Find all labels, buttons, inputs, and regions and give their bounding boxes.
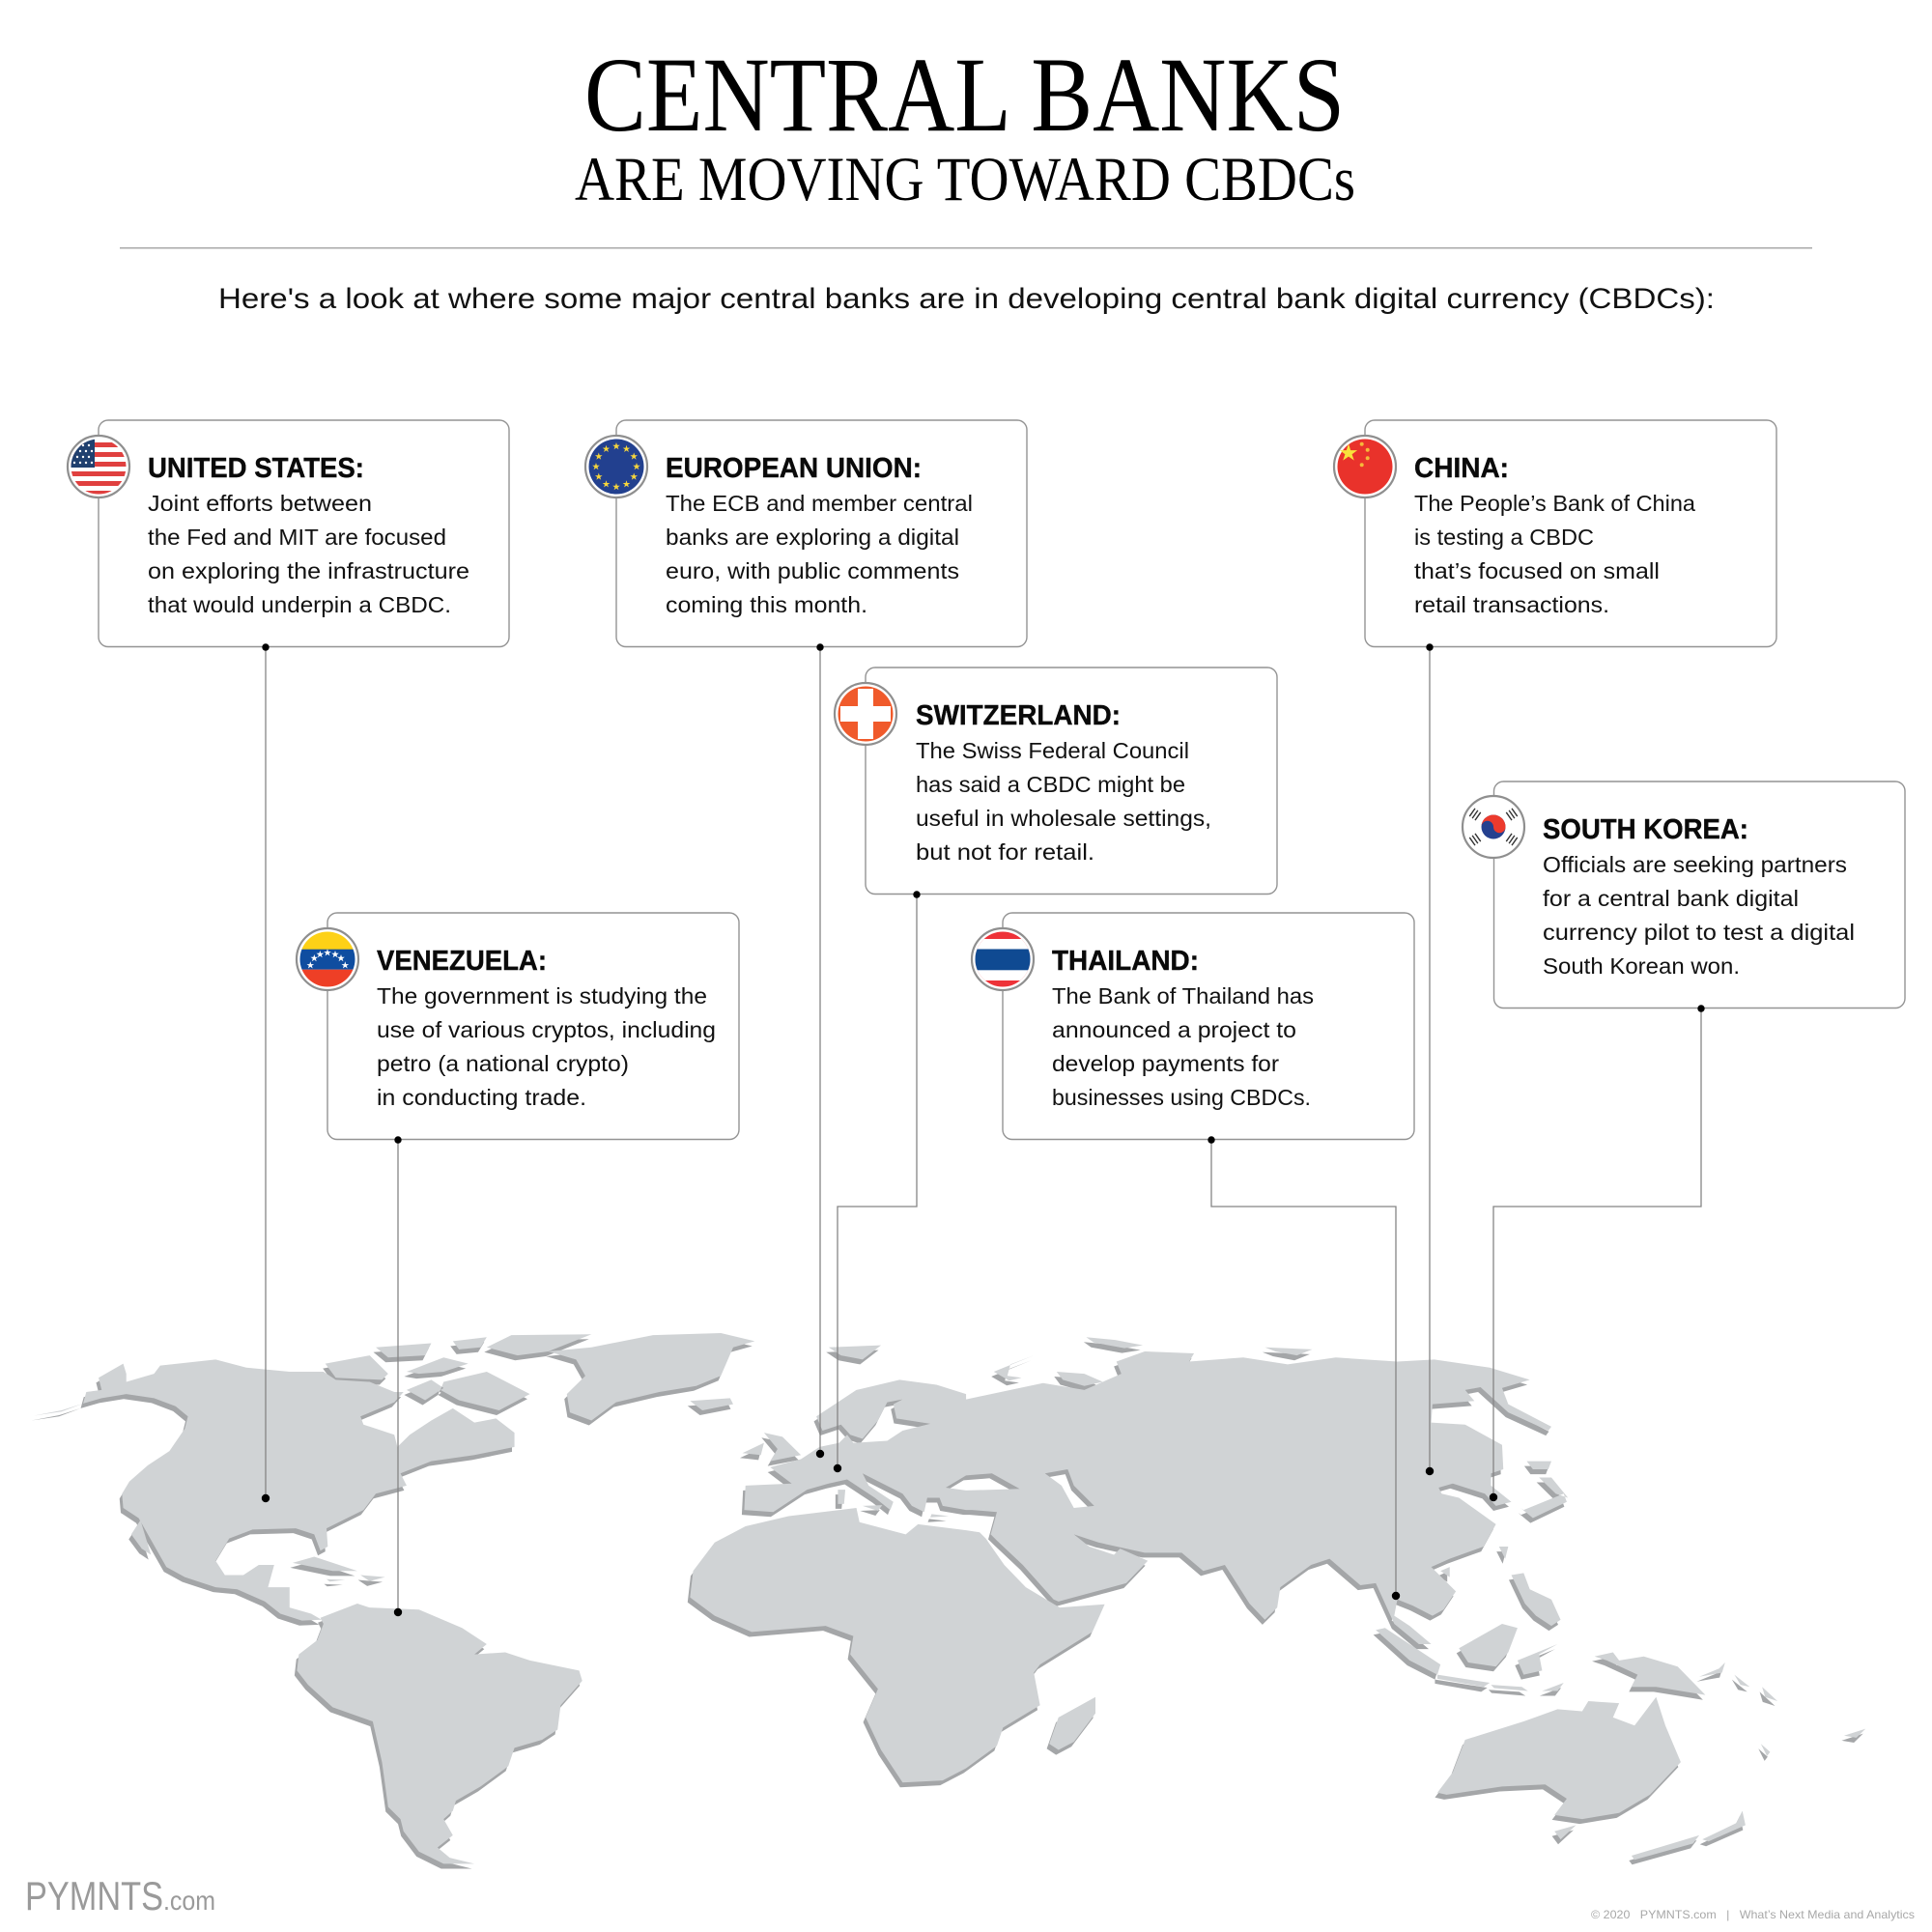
world map [32,1333,1865,1868]
north america [34,1359,515,1621]
body text: businesses using CBDCs. [1052,1085,1311,1110]
body text: develop payments for [1052,1051,1279,1076]
heading: SOUTH KOREA: [1543,814,1748,845]
body text: on exploring the infrastructure [148,558,469,583]
body text: but not for retail. [916,839,1094,865]
body text: use of various cryptos, including [377,1017,716,1042]
body text: South Korean won. [1543,953,1740,979]
body text [1543,852,1855,979]
panel: united states [68,420,509,651]
mediterranean islands [838,1490,949,1518]
body text: in conducting trade. [377,1085,586,1110]
icon: thailand flag [972,928,1034,990]
connector: venezuela [394,1140,402,1616]
body text: retail transactions. [1414,592,1609,617]
land masses [34,1333,1865,1863]
body text: has said a CBDC might be [916,772,1185,797]
russian arctic islands [994,1337,1313,1386]
heading: THAILAND: [1052,946,1199,977]
icon: china flag [1334,436,1396,497]
body text: banks are exploring a digital [666,525,959,550]
panel: south korea [1463,781,1905,1012]
japan [1520,1462,1568,1519]
icon: venezuela flag [297,928,358,990]
body text [377,983,716,1110]
body text: euro, with public comments [666,558,959,583]
panel: china [1334,420,1776,651]
body text: Joint efforts between [148,491,372,516]
australia [1437,1697,1681,1819]
body text: The Bank of Thailand has [1052,983,1314,1009]
java and lesser sunda [1437,1675,1564,1690]
body text: petro (a national crypto) [377,1051,629,1076]
panel: switzerland [835,668,1277,898]
eurasia [744,1351,1551,1644]
britain and ireland [743,1433,801,1462]
melanesia [1699,1662,1865,1756]
body text: currency pilot to test a digital [1543,920,1855,945]
new guinea [1595,1652,1705,1695]
body text: Officials are seeking partners [1543,852,1847,877]
madagascar [1049,1697,1095,1750]
body text: coming this month. [666,592,867,617]
title: CENTRAL BANKS [584,36,1345,154]
svalbard [829,1346,881,1359]
south america [297,1604,582,1863]
body text: The government is studying the [377,983,707,1009]
body text: for a central bank digital [1543,886,1799,911]
body text: The Swiss Federal Council [916,738,1189,763]
philippines [1512,1573,1561,1626]
heading: EUROPEAN UNION: [666,453,922,484]
greenland [549,1333,754,1421]
connector: china [1426,647,1434,1475]
logo: PYMNTS [25,1873,163,1918]
body text [1052,983,1314,1110]
body text [666,491,973,617]
borneo [1459,1624,1518,1666]
body text: announced a project to [1052,1017,1296,1042]
body text [1414,491,1695,617]
panel: european union [585,420,1027,651]
panel: venezuela [297,913,739,1144]
body text: useful in wholesale settings, [916,806,1211,831]
title: ARE MOVING TOWARD CBDCs [575,145,1355,214]
taiwan and hainan [1440,1547,1508,1577]
iceland [690,1398,733,1410]
subtitle: Here's a look at where some major central banks are in developing central bank digital currency (CBDCs): [218,283,1715,315]
sulawesi [1518,1644,1557,1675]
body text: that’s focused on small [1414,558,1660,583]
title [575,36,1355,214]
connector: switzerland [834,895,917,1472]
sumatra [1376,1628,1440,1675]
panel: thailand [972,913,1414,1144]
icon: south korea flag [1463,796,1524,858]
heading: CHINA: [1414,453,1509,484]
new zealand [1632,1811,1746,1860]
map shadow [32,1338,1863,1868]
connector: south korea [1490,1009,1701,1501]
heading: SWITZERLAND: [916,700,1121,731]
heading: VENEZUELA: [377,946,547,977]
body text [916,738,1211,865]
footer credit: © 2020 PYMNTS.com | What’s Next Media and Analytics [1591,1908,1915,1921]
logo: .com [163,1886,215,1916]
heading: UNITED STATES: [148,453,364,484]
connector: thailand [1211,1140,1400,1600]
body text: is testing a CBDC [1414,525,1594,550]
connector: united states [262,647,270,1502]
icon: eu flag [585,436,647,497]
africa [690,1508,1105,1782]
body text: The ECB and member central [666,491,973,516]
connector: european union [816,647,824,1458]
body text: the Fed and MIT are focused [148,525,446,550]
baja california [131,1520,151,1554]
body text [148,491,469,617]
cuba and caribbean [293,1557,385,1581]
canadian arctic islands [326,1334,591,1410]
icon: us flag [68,436,129,497]
body text: The People’s Bank of China [1414,491,1695,516]
tasmania [1554,1825,1576,1839]
icon: swiss flag [835,683,896,745]
body text: that would underpin a CBDC. [148,592,451,617]
